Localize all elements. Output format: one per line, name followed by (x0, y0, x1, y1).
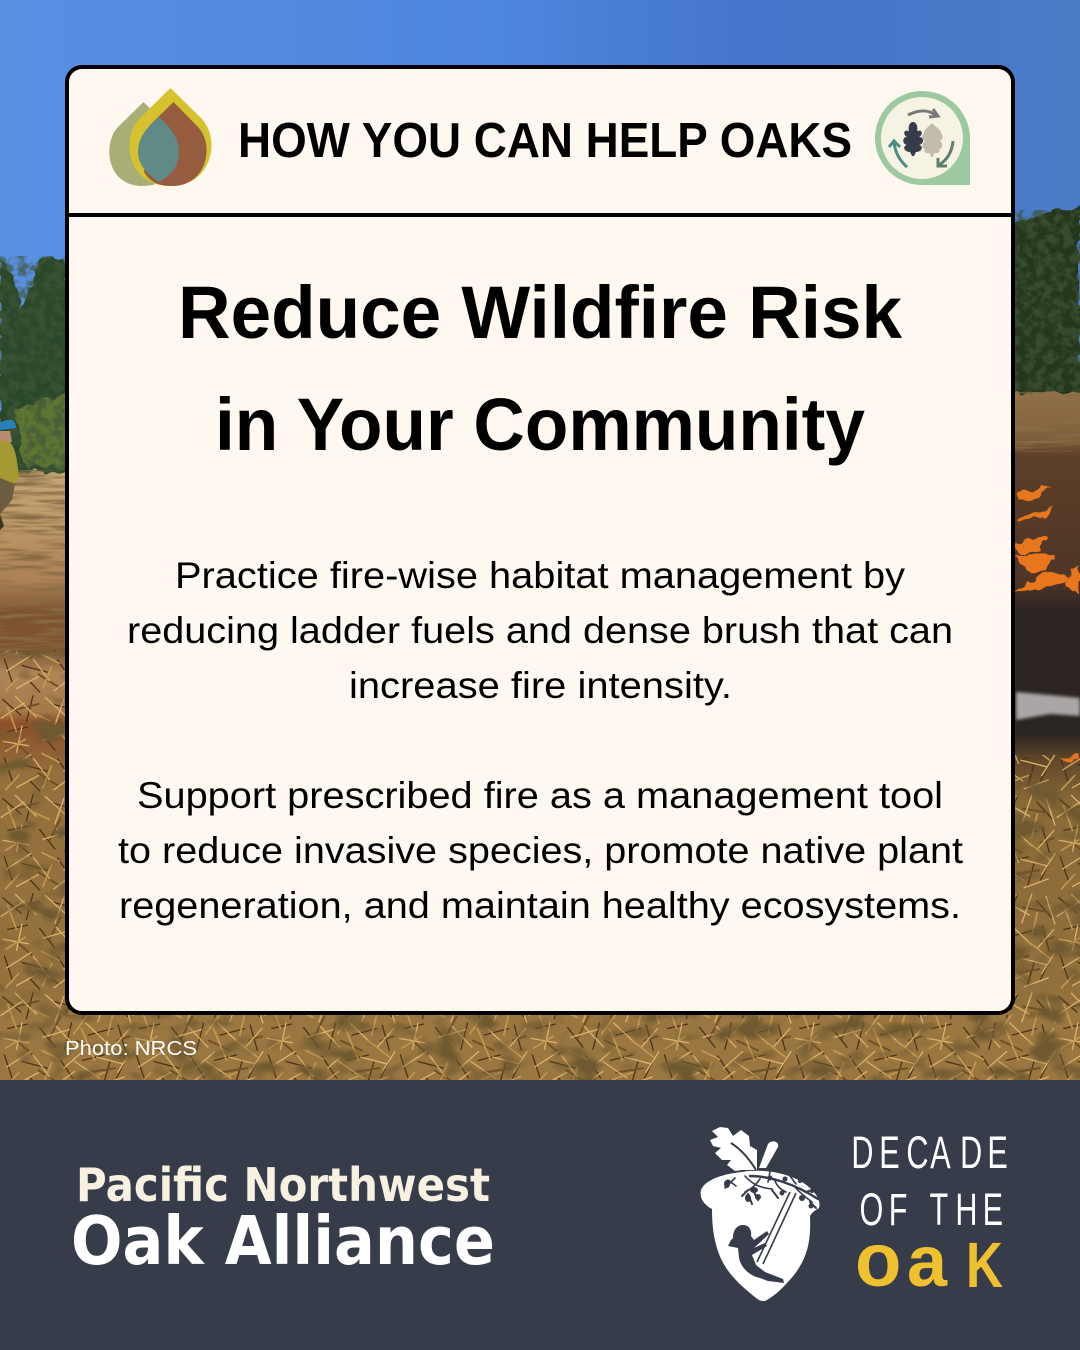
text block: prescribed fire: to reduce invasive species, promote native plant (118, 829, 964, 871)
flames (1014, 486, 1080, 761)
logo: Pacific Northwest Oak Alliance: Oak Alliance (71, 1202, 495, 1280)
pine (922, 123, 943, 157)
text block: habitat management (127, 554, 953, 706)
icon: acorn with child on swing (701, 1127, 819, 1301)
right ground (1012, 388, 1080, 1080)
icon: overlapping drops (109, 88, 211, 186)
logo: Decade of the Oak: DECADE (851, 1128, 1008, 1179)
footer band (0, 1080, 1080, 1350)
straw texture (0, 650, 68, 1080)
main heading (178, 271, 903, 466)
right tree line (1012, 206, 1080, 392)
branches (725, 1172, 818, 1208)
logo: Pacific Northwest Oak Alliance (71, 1158, 495, 1280)
logo: Decade of the Oak: OF THE (860, 1185, 1003, 1236)
icon: oak and pine in a cycle (875, 91, 970, 185)
stem (759, 1141, 778, 1168)
upper ground fibres (0, 470, 68, 660)
cycle arrows (908, 111, 937, 116)
left trees (0, 256, 68, 472)
oak leaf (710, 1127, 757, 1171)
child silhouette (728, 1225, 784, 1283)
swing ropes (757, 1192, 796, 1264)
text block: prescribed fire: regeneration, and maintain healthy ecosystems. (119, 884, 961, 926)
bottom ground (0, 1010, 1080, 1080)
background photo: prescribed burn in oak grassland (0, 0, 1080, 1080)
main heading: in Your Community (215, 383, 865, 466)
text block: prescribed fire: Support prescribed fire as a management tool (137, 774, 943, 816)
logo: Decade of the Oak (851, 1128, 1008, 1303)
text block: habitat management: increase fire intensity. (349, 664, 732, 706)
header title: HOW YOU CAN HELP OAKS (238, 114, 852, 168)
firefighter at left edge (0, 420, 19, 530)
logo: Decade of the Oak: o (855, 1218, 901, 1303)
text block: habitat management: reducing ladder fuels and dense brush that can (127, 609, 953, 651)
oak leaf (903, 122, 923, 156)
header divider (67, 213, 1013, 217)
acorn body and cap (701, 1171, 819, 1301)
logo: Decade of the Oak: a (907, 1222, 948, 1302)
sky (0, 0, 1080, 560)
dark mottling (0, 650, 68, 1080)
photo credit: Photo: NRCS (65, 1037, 197, 1060)
panel: content card (67, 67, 1013, 1013)
text block: habitat management: Practice fire-wise habitat management by (175, 554, 905, 596)
logo: Decade of the Oak: K (966, 1231, 1003, 1301)
main heading: Reduce Wildfire Risk (178, 271, 903, 354)
logo: Pacific Northwest Oak Alliance: Pacific Northwest (76, 1158, 490, 1212)
text block: prescribed fire (118, 774, 964, 926)
left ground (0, 465, 68, 1080)
smoke (1016, 692, 1080, 720)
